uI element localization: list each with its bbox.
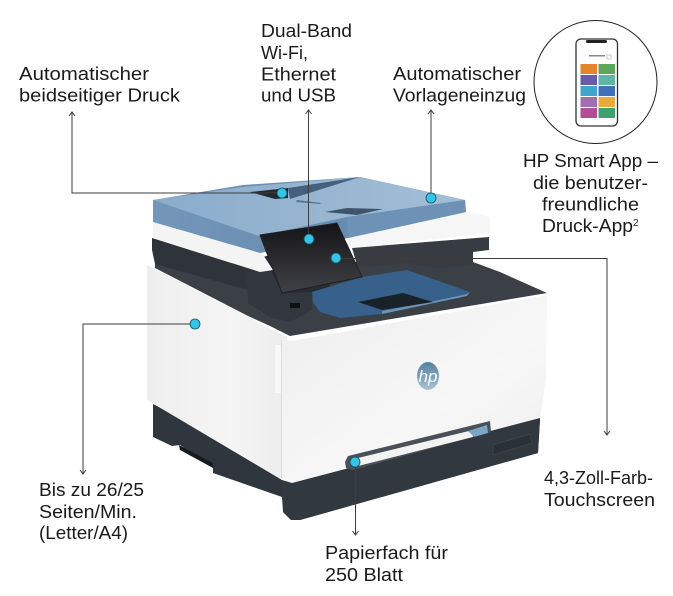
leader line: connectivity: [306, 110, 312, 239]
callout dot: feeder: [426, 193, 436, 203]
label: connectivity: und USB: [261, 84, 336, 106]
label: paper tray: Papierfach für: [325, 542, 448, 563]
label: document feeder: Vorlageneinzug: [393, 84, 526, 106]
label: HP Smart App: HP Smart App –: [523, 150, 659, 171]
callout dot: connectivity: [304, 234, 314, 244]
leader line: document feeder: [428, 110, 434, 198]
label: HP Smart App: Druck-App: [542, 215, 633, 236]
label: duplex printing: beidseitiger Druck: [19, 84, 181, 106]
usb module: [245, 270, 312, 322]
label: touchscreen: [544, 467, 655, 510]
label: speed: Seiten/Min.: [39, 501, 137, 522]
hp logo: hp: [419, 367, 437, 386]
label: touchscreen: 4,3-Zoll-Farb-: [544, 467, 653, 488]
label: HP Smart App: 2: [633, 218, 639, 229]
label: HP Smart App: [523, 150, 659, 236]
label: document feeder: Automatischer: [393, 63, 521, 84]
left dark band: [152, 238, 270, 290]
tray label plate: [493, 434, 532, 455]
label: duplex printing: [19, 63, 181, 106]
scanner lid: [153, 177, 466, 253]
label: document feeder: [393, 63, 526, 106]
leader line: touchscreen: [337, 258, 610, 435]
label: HP Smart App: freundliche: [542, 194, 639, 214]
callout dot: speed: [190, 319, 200, 329]
paper slot: [345, 421, 491, 470]
label: connectivity: Dual-Band: [261, 20, 352, 41]
output tray: [312, 270, 470, 318]
printer illustration: [147, 177, 547, 520]
white scanner band: [153, 221, 273, 272]
hp logo: [417, 362, 439, 390]
label: connectivity: Wi-Fi,: [261, 42, 308, 63]
label: connectivity: Ethernet: [261, 64, 336, 84]
label: connectivity: [261, 20, 352, 106]
printer body front panel: [281, 295, 547, 483]
leader line: duplex: [69, 112, 282, 193]
label: paper tray: [325, 542, 448, 585]
right dark band: [352, 237, 489, 269]
printer base tray: [153, 404, 540, 520]
label: speed: Bis zu 26/25: [39, 479, 144, 500]
callout dot: document slot: [277, 188, 287, 198]
dark area under tablet: [245, 255, 330, 300]
callout dot: touchscreen: [331, 253, 341, 263]
label: touchscreen: Touchscreen: [544, 489, 655, 510]
app circle with phone: [534, 20, 657, 144]
leader line: speed: [80, 324, 195, 474]
printer body side panel: [147, 265, 287, 480]
callout dot: paper tray: [350, 457, 360, 467]
leader line: paper tray: [352, 462, 358, 535]
document feeder slot: [250, 177, 383, 215]
label: paper tray: 250 Blatt: [325, 564, 403, 585]
touchscreen: [260, 223, 362, 293]
printer output deck: [155, 262, 547, 336]
icon: phone: [576, 39, 618, 126]
label: HP Smart App: die benutzer-: [533, 172, 648, 193]
label: duplex printing: Automatischer: [19, 63, 149, 84]
label: speed: [39, 479, 144, 543]
label: speed: (Letter/A4): [39, 522, 128, 543]
